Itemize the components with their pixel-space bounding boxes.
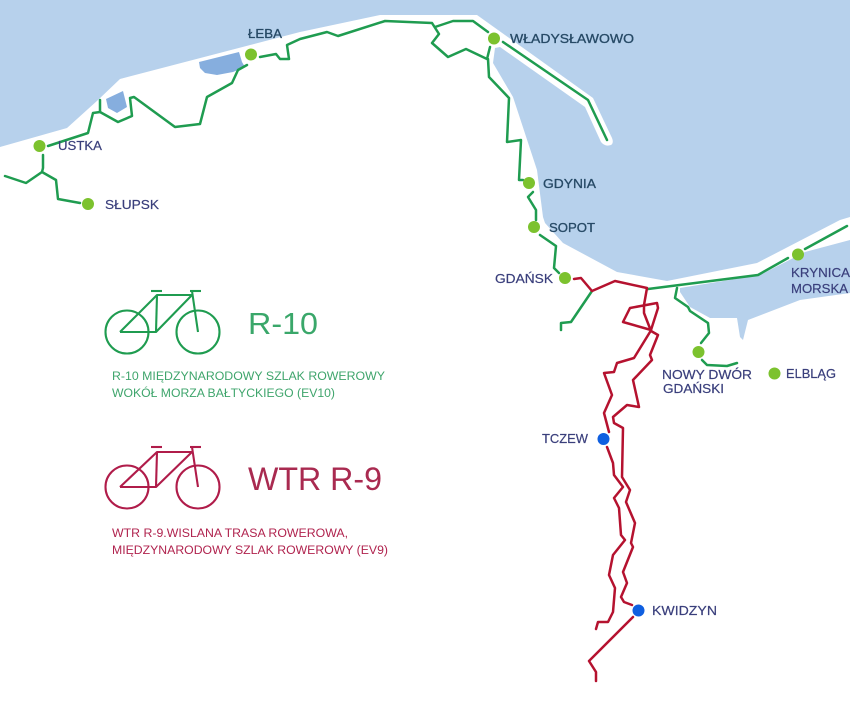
red route WTR R-9 on the map xyxy=(574,278,658,681)
lake: Łebsko xyxy=(199,52,245,75)
heading: WTR R-9: WTR R-9 xyxy=(248,461,382,497)
city labels: GDAŃSKI xyxy=(663,381,724,396)
city labels: ELBLĄG xyxy=(786,367,836,381)
description: R-10: R-10 MIĘDZYNARODOWY SZLAK ROWEROWY xyxy=(112,371,385,383)
icon: green bicycle xyxy=(106,291,220,354)
city labels: KRYNICA xyxy=(791,266,850,280)
city labels: USTKA xyxy=(58,139,103,153)
city labels: NOWY DWÓR xyxy=(662,367,752,382)
city labels: GDAŃSK xyxy=(495,271,554,286)
description: WTR R-9: MIĘDZYNARODOWY SZLAK ROWEROWY (EV9) xyxy=(112,545,388,557)
city markers xyxy=(34,32,804,616)
heading: R-10: R-10 xyxy=(248,306,318,341)
lake: Gardno xyxy=(106,91,127,113)
description: R-10 xyxy=(112,371,385,400)
city labels: SŁUPSK xyxy=(105,198,160,212)
city labels xyxy=(58,27,850,618)
description: WTR R-9: WTR R-9.WISLANA TRASA ROWEROWA, xyxy=(112,528,348,540)
description: WTR R-9 xyxy=(112,528,388,557)
description: R-10: WOKÓŁ MORZA BAŁTYCKIEGO (EV10) xyxy=(112,387,335,400)
city labels: SOPOT xyxy=(549,221,595,235)
green route R-10 on the map xyxy=(5,21,847,366)
city labels: ŁEBA xyxy=(248,27,283,41)
city labels: MORSKA xyxy=(791,282,849,296)
city labels: WŁADYSŁAWOWO xyxy=(510,32,634,46)
legend: R-10 xyxy=(106,291,385,400)
legend: WTR R-9 xyxy=(106,447,388,557)
city labels: GDYNIA xyxy=(543,177,597,191)
city labels: TCZEW xyxy=(542,432,588,446)
city labels: KWIDZYN xyxy=(652,604,717,618)
icon: red bicycle xyxy=(106,447,220,508)
lagoon: Vistula Lagoon xyxy=(680,240,850,340)
sea: Baltic and Gulf of Gdańsk xyxy=(0,0,850,281)
